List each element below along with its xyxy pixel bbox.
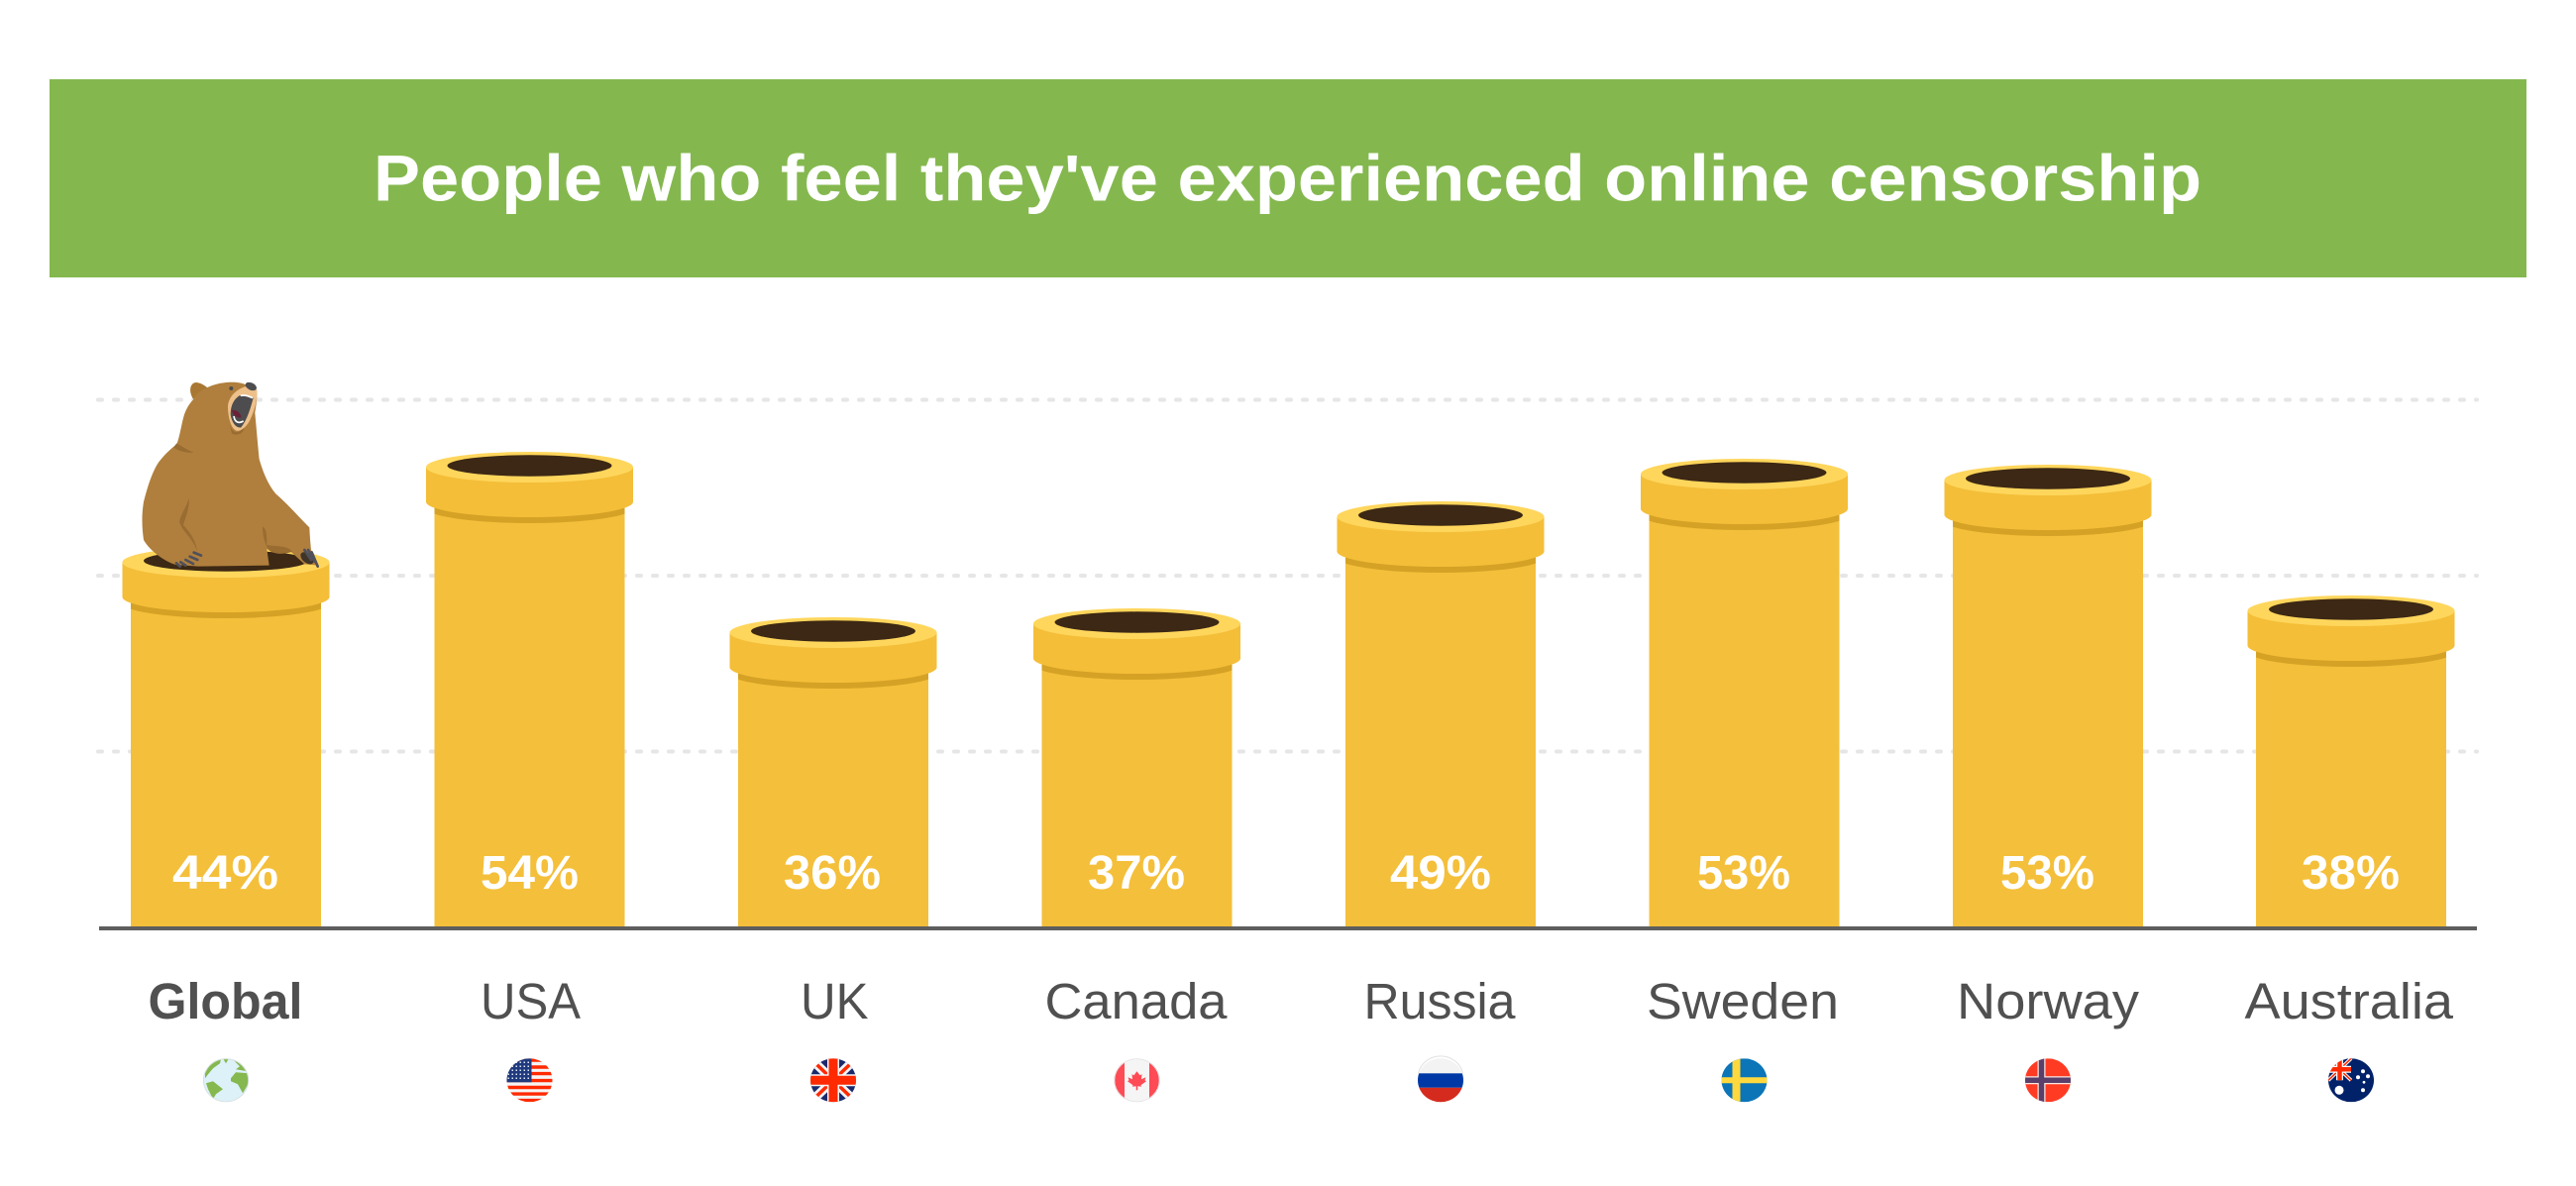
value labels: 49%: [1390, 846, 1491, 900]
bar chart: [99, 452, 2477, 930]
value labels: 53%: [2000, 846, 2094, 900]
value labels: 44%: [172, 846, 278, 900]
value labels: 37%: [1088, 846, 1185, 900]
value labels: 38%: [2302, 846, 2400, 900]
title banner: [50, 79, 2526, 277]
title: People who feel they've experienced online censorship: [374, 141, 2201, 214]
value labels: 54%: [481, 846, 579, 900]
category labels: UK: [801, 973, 868, 1029]
icon: Canada flag: [1114, 1058, 1159, 1102]
value labels: [172, 846, 2400, 900]
category labels: [149, 973, 2454, 1029]
icon: UK flag: [810, 1058, 856, 1102]
pipe bar: Canada 37%: [1033, 608, 1240, 926]
category labels: Australia: [2245, 973, 2454, 1029]
category labels: Global: [149, 973, 303, 1029]
category labels: Canada: [1044, 973, 1228, 1029]
category labels: Sweden: [1647, 973, 1839, 1029]
pipe bar: UK 36%: [729, 617, 937, 926]
category labels: USA: [481, 973, 581, 1029]
pipe bar: Australia 38%: [2247, 595, 2455, 926]
pipe bar: Russia 49%: [1338, 501, 1544, 926]
value labels: 36%: [784, 846, 881, 900]
icon: USA flag: [507, 1058, 553, 1102]
icon: roaring bear mascot: [142, 380, 319, 567]
icon: globe: [203, 1058, 249, 1102]
category labels: Russia: [1363, 973, 1516, 1029]
pipe bar: USA 54%: [426, 452, 633, 926]
icon: Russia flag: [1418, 1056, 1463, 1103]
icon: Sweden flag: [1722, 1058, 1768, 1102]
icon: Norway flag: [2025, 1058, 2071, 1102]
category labels: Norway: [1957, 973, 2140, 1029]
pipe bar: Sweden 53%: [1641, 459, 1848, 926]
icon: Australia flag: [2328, 1058, 2374, 1102]
pipe bar: Norway 53%: [1944, 465, 2152, 926]
value labels: 53%: [1697, 846, 1790, 900]
pipe bar: Global 44%: [123, 547, 329, 926]
